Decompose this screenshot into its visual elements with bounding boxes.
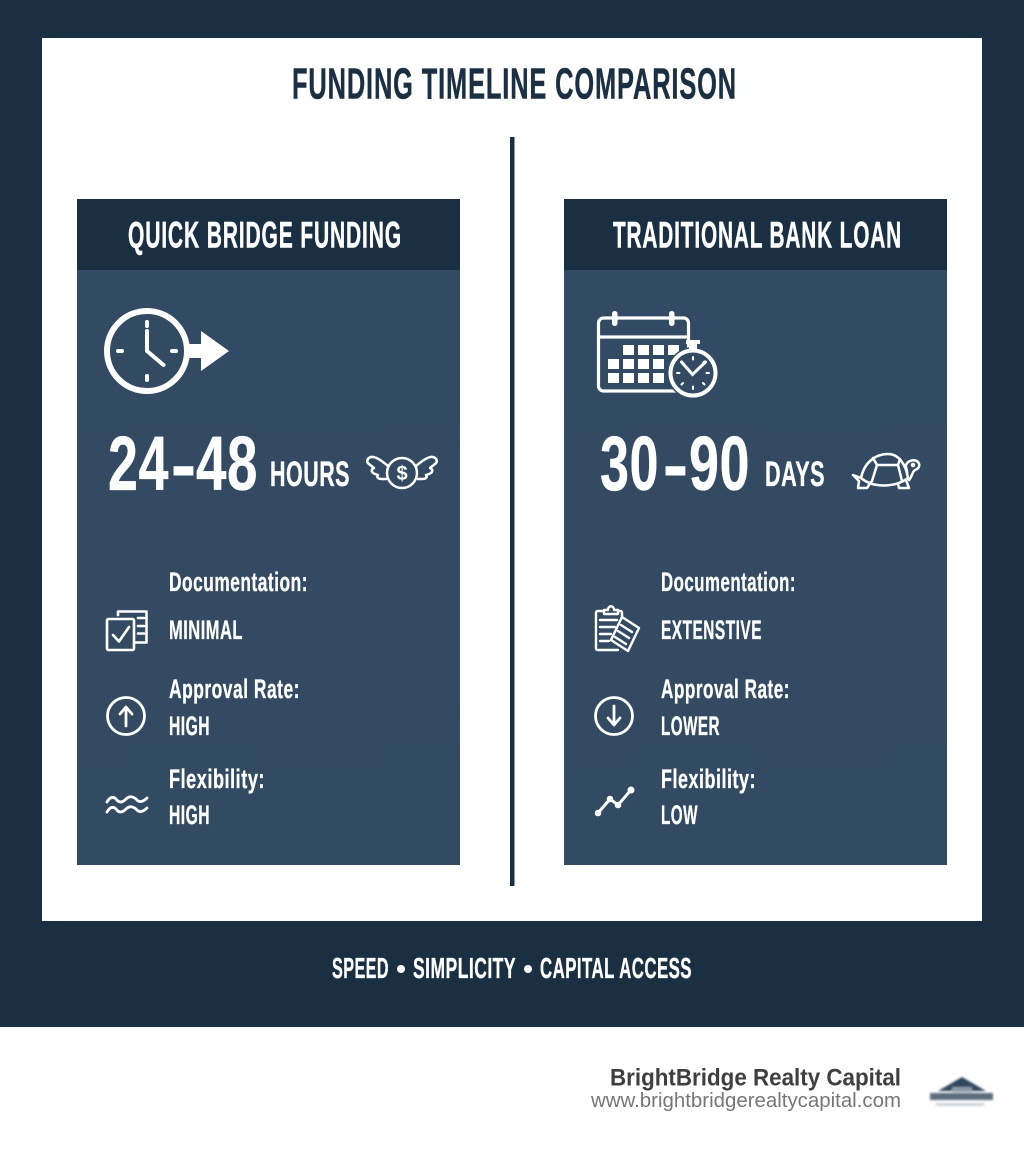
row: approval rate high xyxy=(108,674,300,741)
header bar: quick bridge funding: QUICK BRIDGE FUNDING xyxy=(128,214,402,256)
row: documentation minimal: Documentation: xyxy=(169,567,308,597)
big number: 30-90 days xyxy=(600,420,825,508)
row: approval rate high: HIGH xyxy=(169,711,210,741)
big number: 30-90 days: 90 xyxy=(689,421,750,507)
big number: 24-48 hours: 24 xyxy=(108,421,169,507)
footer brand name: BrightBridge Realty Capital xyxy=(610,1064,901,1092)
icon: clipboard with papers xyxy=(596,606,639,651)
tagline: SPEED xyxy=(332,953,389,985)
row: approval rate lower: LOWER xyxy=(661,711,720,741)
panel: traditional bank loan xyxy=(564,199,947,865)
icon: waves xyxy=(107,797,147,812)
icon: checklist documents xyxy=(107,612,146,650)
row: documentation minimal xyxy=(107,567,308,650)
center divider xyxy=(510,137,514,886)
row: documentation minimal: MINIMAL xyxy=(169,615,243,645)
big number: 30-90 days: 30 xyxy=(600,421,659,507)
tagline: SIMPLICITY xyxy=(413,953,516,985)
big number: 30-90 days: DAYS xyxy=(765,454,825,494)
big number: 24-48 hours xyxy=(108,420,350,508)
icon: calendar with stopwatch xyxy=(598,311,719,399)
icon: up arrow circle xyxy=(108,698,144,734)
row: flexibility high xyxy=(107,764,265,830)
tagline: • xyxy=(523,953,533,984)
row: approval rate lower: Approval Rate: xyxy=(661,674,790,704)
footer url: www.brightbridgerealtycapital.com xyxy=(590,1090,901,1112)
icon: flying money: $ xyxy=(396,463,408,485)
row: flexibility high: Flexibility: xyxy=(169,764,265,794)
panel: quick bridge funding xyxy=(77,199,460,865)
row: flexibility high: HIGH xyxy=(169,800,210,830)
big number: 24-48 hours: 48 xyxy=(196,421,258,507)
row: approval rate high: Approval Rate: xyxy=(169,674,300,704)
row: documentation extensive: EXTENSTIVE xyxy=(661,615,762,645)
tagline: • xyxy=(396,953,406,984)
row: flexibility low xyxy=(595,764,756,830)
white content panel xyxy=(42,38,982,921)
icon: clock with arrow xyxy=(107,311,229,391)
icon: flying money xyxy=(367,457,437,488)
row: approval rate lower xyxy=(596,674,790,741)
big number: 24-48 hours: HOURS xyxy=(270,454,350,494)
header bar: quick bridge funding xyxy=(77,199,460,270)
row: documentation extensive: Documentation: xyxy=(661,567,796,597)
header bar: traditional bank loan xyxy=(564,199,947,270)
icon: turtle xyxy=(853,454,919,488)
row: documentation extensive xyxy=(596,567,796,651)
icon: down arrow circle xyxy=(596,698,632,734)
icon: line chart xyxy=(595,787,634,816)
icon: brand logo xyxy=(930,1077,993,1106)
tagline xyxy=(332,953,692,985)
big number: 24-48 hours: - xyxy=(170,420,196,508)
row: flexibility low: LOW xyxy=(661,800,698,830)
big number: 30-90 days: - xyxy=(662,420,688,508)
row: flexibility low: Flexibility: xyxy=(661,764,756,794)
tagline: CAPITAL ACCESS xyxy=(540,953,692,985)
